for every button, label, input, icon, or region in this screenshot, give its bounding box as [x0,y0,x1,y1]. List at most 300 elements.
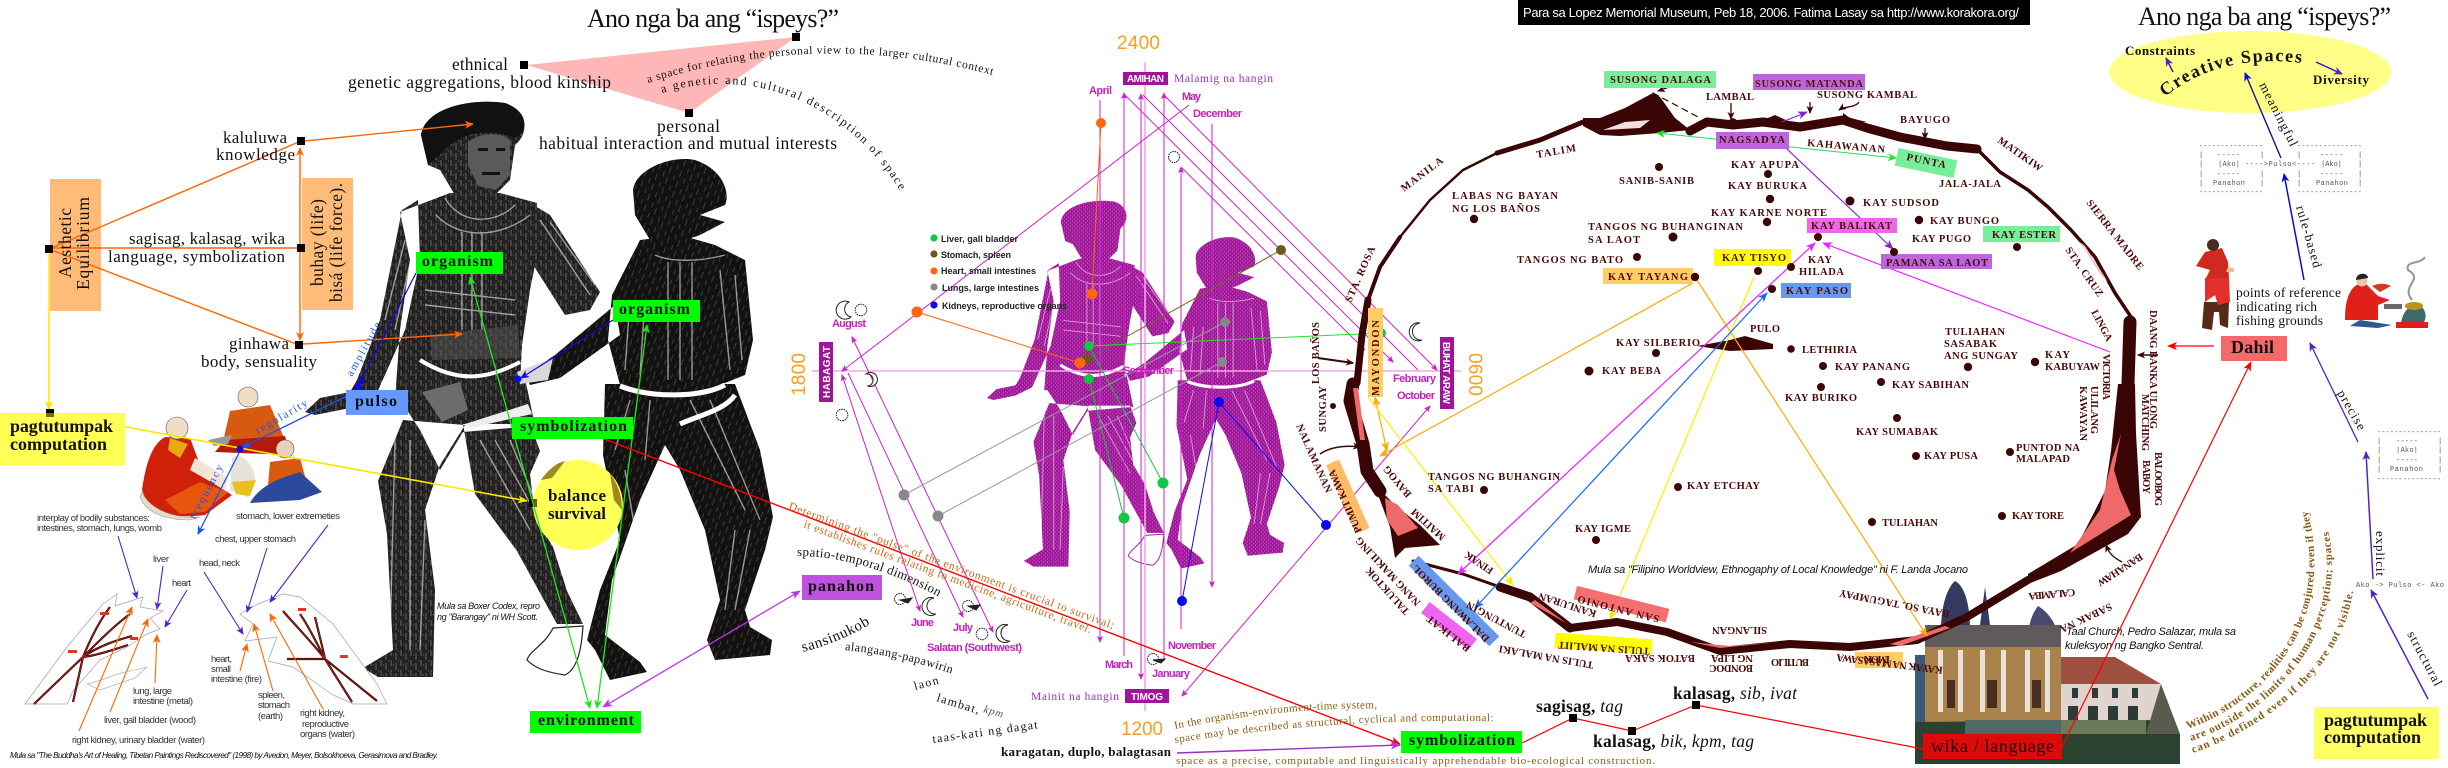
pulse point labels: interplay of bodily substances: [37,513,150,524]
language variants: kalasag, sib, ivat [1673,683,1798,703]
calendar direction labels: TIMOG [1131,692,1163,703]
ascii pulse diagram: top: ----- [2320,152,2343,160]
map small pointers [1318,86,2158,562]
points of reference text: indicating rich [2236,299,2317,314]
ascii pulse diagram: bottom: Panahon [2390,466,2423,474]
brown statement on organism-environment-time system: In the organism-environment-time system, [1174,702,1376,729]
aesthetic equilibrium diagram: bisá (life force). [326,183,346,302]
calendar direction labels: 1200 [1121,719,1163,740]
map place labels: upright: PUNTOD NA [2016,443,2080,454]
curved statement on structure: can be defined even if they are not visible. [2192,592,2354,752]
spatio-temporal word list: lambat, [935,690,981,717]
ascii pulse diagram: top [2199,143,2362,197]
map place labels: rotated around the coast: CALAMBA [2028,586,2076,601]
map place labels: upright: KAY SUDSOD [1863,198,1939,209]
panahon box [802,575,882,600]
map place labels: rotated around the coast: NG LIPA [1711,652,1753,663]
calendar month labels: March [1105,659,1133,671]
spatio-temporal word list: sansinukob [802,618,869,652]
ascii pulse diagram: bottom: ----- [2396,438,2418,446]
aesthetic equilibrium diagram: buhay (life) [307,199,327,286]
calendar direction labels: Malamig na hangin [1174,73,1273,85]
title: left: Ano nga ba ang “ispeys?” [587,4,839,33]
calendar month labels: January [1152,668,1191,680]
calendar organ connectors [904,123,1381,601]
map place labels: upright: BAYUGO [1900,115,1950,126]
map place labels: upright: SUSONG KAMBAL [1817,90,1917,101]
organism box 2 [613,300,700,322]
calendar month labels: July [953,622,974,634]
spatio-temporal word list: taas-kati ng dagat [931,717,1039,746]
calendar direction labels: Mainit na hangin [1031,691,1119,703]
calendar month labels: June [911,617,934,629]
curved statement on structure: are outside the limits of human perception; spaces [2190,532,2334,741]
triangle diagram: ethnical, personal: a space for relating the personal view to the larger cultural context [647,46,994,83]
pulse arrows: amplitude, regularity, frequency: frequency [187,462,226,521]
map place labels: upright: KAY BUNGO [1930,216,1999,227]
map place labels: upright: KAY SILBERIO [1616,338,1700,349]
illustration: man in red [2196,239,2234,330]
map place labels: upright: SUSONG DALAGA [1610,75,1711,86]
balance survival circle: survival [548,504,606,523]
caption: Boxer Codex: Mula sa Boxer Codex, repro [437,601,540,611]
map place labels: upright: TULIAHAN [1945,327,2005,338]
map place labels: rotated around the coast: TALUKTOK [1363,564,1412,616]
organism box 1 [416,252,503,274]
map place labels: upright: JALA-JALA [1939,179,2001,190]
map place labels: rotated around the coast: MANILA [1399,155,1446,194]
illustration: cooking figure and smoke [2345,257,2428,328]
symbolization box 1 [512,417,633,439]
ascii pulse diagram: top: | [2199,152,2203,160]
map place labels: upright: KAY SUMABAK [1856,427,1939,438]
map place labels: rotated around the coast: MATCHING [2139,394,2150,451]
yellow computation arrow and box: computation [10,434,107,454]
aesthetic equilibrium diagram: knowledge [216,145,295,164]
map place labels: rotated around the coast: ULILANG [2088,386,2099,434]
calendar legend [930,234,1067,311]
spatio-temporal word list: karagatan, duplo, balagtasan [1001,744,1172,759]
aesthetic equilibrium diagram: Equilibrium [73,197,93,290]
caption: Taal Church: kuleksyon ng Bangko Sentral. [2065,640,2204,652]
language variants [1536,683,1798,751]
ascii pulse diagram: top: |Ako| [2218,161,2240,169]
yellow computation arrow and box: pagtutumpak [10,416,113,436]
environment pulse statement: it establishes rules relating to medicine, agriculture, travel. [802,519,1093,636]
map place labels: rotated around the coast: BALIKAT [1425,613,1473,653]
Dahil box [2221,336,2287,361]
environment box: environment [538,712,635,729]
symbolization box 2: symbolization [1409,732,1515,749]
ascii pulse diagram: top: Panahon [2213,180,2245,188]
top banner: Para sa Lopez Memorial Museum, Peb 18, 2006. Fatima Lasay sa http://www.korakora.org/ [1523,5,2019,20]
map place labels: upright: KAY [1808,255,1832,266]
ascii pulse diagram: top: | [2260,171,2264,179]
flow: meaningful arrow: meaningful [2256,80,2302,149]
map place labels: rotated around the coast: LINGA [2088,308,2114,344]
caption: Buddha's art of healing: Mula sa "The Buddha's Art of Healing, Tibetan Paintings Rediscovered" (1998) by Avedon, Meyer, Bolsokhoeva, Gerasimova and Bradley. [10,751,438,760]
pulse point arrows [79,525,328,731]
map place labels: upright: LAMBAL [1706,92,1754,103]
map place labels: upright: LETHIRIA [1802,345,1857,356]
spatio-temporal word list: laon [912,673,940,693]
calendar month labels: November [1168,640,1217,652]
map place labels: upright: KAY PUGO [1912,234,1971,245]
pulse arrows: amplitude, regularity, frequency: regularity [254,397,310,437]
aesthetic equilibrium diagram: kaluluwa [223,128,287,147]
triangle diagram: ethnical, personal: a genetic and cultural description of space [662,76,904,190]
ascii pulse diagram: top: ---->Pulso<---- [2245,161,2315,169]
pink bays on the coast [1353,120,2131,648]
map place labels: rotated around the coast: SUNGAY [1318,386,1329,432]
calendar month labels: August [832,318,866,330]
map place labels: upright: PUNTA [1905,152,1947,171]
map place labels: rotated around the coast: BAYOG [1381,463,1414,499]
ascii pulse diagram: bottom: | [2377,457,2381,465]
map place labels: rotated around the coast: SIERRA MADRE [2084,198,2145,273]
map place labels: upright: TULIAHAN [1882,518,1938,529]
calendar legend: Heart, small intestines [941,266,1036,276]
triangle diagram: ethnical, personal: ethnical [452,54,508,74]
points of reference text [2236,285,2341,328]
map place labels: upright: LABAS NG BAYAN [1452,191,1558,202]
ascii pulse diagram: bottom: | [2438,438,2442,446]
calendar month lines [842,93,1437,696]
flow: explicit arrow [2366,452,2388,579]
map place labels: rotated around the coast: FINAK [1462,548,1496,576]
pulso box [346,390,408,415]
map place labels: upright: NAGSADYA [1719,135,1785,146]
tattooed figures illustration [305,102,773,680]
map place labels: upright: KAY BALIKAT [1811,221,1892,232]
flow: rule-based arrow [2284,174,2325,280]
creative spaces ellipse: Constraints [2125,43,2195,58]
pagtutumpak computation box: right [2314,707,2439,759]
caption: Taal Church [2065,626,2236,652]
pulse point labels: (earth) [258,711,283,722]
top banner [1518,0,2030,25]
map place labels: upright: SANIB-SANIB [1619,176,1694,187]
map place labels: rotated around the coast: PUMIT KAWA [1327,467,1365,534]
ascii pulse diagram: top: --------------- [2199,143,2263,151]
illustration: monks reading the pulse [140,387,322,520]
calendar direction labels: HABAGAT [822,346,833,398]
ascii pulse diagram: top: --------------- [2297,143,2362,151]
calendar direction labels: 1800 [789,353,810,396]
map place labels: upright: KAY ETCHAY [1687,481,1760,492]
pulse point labels: intestine (metal) [133,696,193,707]
aesthetic equilibrium diagram [45,124,473,371]
Taal Church painting [1915,581,2180,764]
map place labels: upright: KAY BURUKA [1728,181,1807,192]
ascii pulse diagram: bottom: | [2438,457,2442,465]
calendar axes [812,62,1461,711]
ascii pulse diagram: top: --------------- [2297,189,2362,197]
brown statement on organism-environment-time system: space as a precise, computable and linguistically apprehendable bio-ecological construction. [1176,755,1655,767]
map place labels: rotated around the coast: MATIKIW [1995,135,2045,175]
environment box [530,711,641,733]
flow: precise arrow: precise [2334,387,2370,433]
calendar direction labels [789,33,1485,740]
map place labels: upright: KAY TORE [2012,511,2064,522]
triangle diagram: ethnical, personal [348,33,994,190]
map place labels: upright: MALAPAD [2016,454,2070,465]
map place labels: upright: KAY IGME [1575,524,1631,535]
map place labels: upright: SA LAOT [1588,235,1640,246]
purple tattooed figures on calendar [987,201,1285,568]
calendar legend: Kidneys, reproductive organs [942,301,1067,311]
map place labels: rotated around the coast: SAN ANTONIO [1577,593,1661,624]
map place labels: upright: SA TABI [1428,484,1474,495]
pulse point labels: heart [172,578,191,589]
ascii pulse diagram: top: | [2297,180,2301,188]
map place labels: rotated around the coast: NANG MAKILING [1354,534,1423,607]
pulse point labels: stomach, lower extremeties [236,511,340,522]
map place dots [1330,163,2039,544]
calendar direction labels: BUHAT ARAW [1440,342,1451,405]
moon phase symbols [836,152,1422,664]
ascii pulse diagram: top: ----- [2320,171,2343,179]
ascii pulse diagram: top: ----- [2217,171,2240,179]
map place labels: rotated around the coast: IMOK [1863,653,1890,664]
ascii pulse diagram: bottom: --------------- [2377,476,2441,484]
calendar legend: Stomach, spleen [941,250,1011,260]
wika language box: wika / language [1931,736,2054,756]
ascii pulse diagram: bottom: | [2438,466,2442,474]
ascii pulse diagram: bottom: | [2377,447,2381,455]
map place labels: rotated around the coast: BATOK SAKA [1625,652,1695,663]
aesthetic equilibrium diagram: body, sensuality [201,352,318,371]
ascii pulse diagram: bottom: --------------- [2377,429,2441,437]
balance survival circle [529,460,623,550]
ascii pulse diagram: top: | [2358,152,2362,160]
pulse point labels: intestines, stomach, lungs, womb [37,523,162,534]
balance survival circle: balance [548,486,606,505]
pagtutumpak computation box: right: computation [2324,727,2421,747]
ascii pulse diagram: top: | [2260,152,2264,160]
caption: Taal Church: Taal Church, Pedro Salazar, mula sa [2066,626,2236,638]
brown statement on organism-environment-time system: space may be described as structural, cyclical and computational: [1174,714,1493,744]
map place labels: rotated around the coast: SILANGAN [1712,624,1767,635]
ascii pulse diagram: top: | [2199,180,2203,188]
map place labels: upright: NG LOS BAÑOS [1452,203,1540,215]
calendar month labels: September [1123,365,1175,377]
calendar legend: Liver, gall bladder [941,234,1018,244]
map place labels: rotated around the coast: TULIS NA MALAKI [1498,642,1595,670]
calendar month labels: May [1182,91,1202,103]
ascii pulse diagram: top: | [2297,171,2301,179]
map place labels: upright: KAY TISYO [1722,253,1786,264]
aesthetic equilibrium diagram: language, symbolization [108,247,286,266]
flow: structural arrow [2371,590,2446,699]
environment pulse statement: Determining the "pulse" of the environment is crucial to survival; [787,501,1116,632]
hand drawings [25,594,387,704]
map place labels: rotated around the coast: DAANG BANKA ULONG [2147,310,2158,429]
points of reference text: points of reference [2236,285,2341,300]
map place labels: upright: KAY PANANG [1835,362,1910,373]
triangle diagram: ethnical, personal: habitual interaction and mutual interests [539,133,837,153]
map colored place boxes [1326,71,2060,668]
white foot of the front figure [527,626,583,675]
panahon box: panahon [808,578,874,595]
pulse point labels: heart, [211,654,232,665]
pulse arrows: amplitude, regularity, frequency [187,273,613,534]
creative spaces ellipse: Diversity [2313,72,2370,87]
calendar direction labels: AMIHAN [1127,74,1164,85]
ascii pulse diagram: top: Panahon [2316,180,2348,188]
map place labels: upright: KAHAWANAN [1807,138,1886,156]
calendar month labels: October [1397,390,1436,402]
aesthetic equilibrium diagram: sagisag, kalasag, wika [129,229,285,248]
organism box 1: organism [422,253,494,270]
flow: explicit arrow: explicit [2373,531,2388,576]
map place labels: rotated around the coast: BONDOC [1709,662,1753,673]
map place labels: upright [1428,75,2100,535]
symbolization box 1: symbolization [520,418,627,435]
ascii pulse diagram: top: ----- [2217,152,2240,160]
map place labels: upright: SASABAK [1944,339,1998,350]
map place labels: upright: PAMANA SA LAOT [1886,258,1988,269]
ascii pulse diagram: top: | [2260,180,2264,188]
ascii pulse diagram: bottom: ----- [2396,457,2418,465]
map place labels: upright: KABUYAW [2045,362,2100,373]
map place labels: rotated around the coast: BANAHAW [2094,550,2144,588]
calendar legend: Lungs, large intestines [942,283,1039,293]
calendar month labels: April [1089,85,1112,97]
map place labels: rotated around the coast: DALAWANG BUROL [1411,562,1492,644]
map place labels: rotated around the coast: KANLURAN [1537,589,1598,619]
spatio-temporal word list: alangaang-papawirin [845,642,952,674]
map place labels: rotated around the coast: MAYONDON [1371,320,1382,396]
title: right: Ano nga ba ang “ispeys?” [2138,2,2391,31]
ascii pulse diagram: top: | [2358,180,2362,188]
face shading of front figure [468,134,510,190]
calendar month labels: December [1193,108,1243,120]
aesthetic equilibrium diagram: ginhawa [229,334,289,353]
calendar direction labels: 0600 [1464,353,1485,396]
map place labels: upright: HILADA [1799,267,1844,278]
map place labels: rotated around the coast: LOS BAÑOS [1310,322,1322,384]
flow: rule-based arrow: rule-based [2293,204,2325,270]
map place labels: rotated around the coast: STA. CRUZ [2063,245,2105,299]
creative spaces ellipse: Creative Spaces [2160,50,2302,94]
spatio-temporal word list [798,548,1172,759]
map place labels: rotated around the coast: MAITIM [1409,506,1448,542]
map place labels: upright: KAY APUPA [1731,160,1799,171]
calendar month labels: February [1393,373,1437,385]
map place labels: upright: TANGOS NG BUHANGIN [1428,472,1560,483]
pulse point labels: right kidney, urinary bladder (water) [72,735,205,746]
Dahil box: Dahil [2231,337,2274,357]
map place labels: upright: KAY KARNE NORTE [1711,208,1827,219]
map place labels: rotated around the coast: TULIS NA MALIIT [1558,639,1650,656]
map place labels: rotated around the coast: STA. ROSA [1344,245,1378,304]
ascii pulse diagram: bottom [2356,429,2444,590]
map place labels: rotated around the coast: BUTILIO [1771,656,1809,667]
map place labels: upright: TANGOS NG BATO [1517,255,1623,266]
language variants: kalasag, bik, kpm, tag [1593,731,1754,751]
caption: Jocano: Mula sa "Filipino Worldview, Ethnogaphy of Local Knowledge" ni F. Landa Jocano [1588,564,1968,576]
map place labels: rotated around the coast: TALIM [1536,143,1577,161]
language variants: sagisag, tag [1536,696,1623,716]
points of reference text: fishing grounds [2236,313,2323,328]
pulse point labels: stomach [258,700,290,711]
map place labels: upright: KAY ESTER [1992,230,2056,241]
calendar month labels [832,85,1437,680]
ascii pulse diagram: bottom: | [2377,466,2381,474]
map place labels: rotated around the coast: SABAK NA [2058,600,2113,634]
pulse arrows: amplitude, regularity, frequency: amplitude [344,320,384,378]
map place labels: upright: KAY SABIHAN [1892,380,1969,391]
organism, symbolization and environment flows [470,277,2251,753]
calendar direction labels: 2400 [1117,33,1160,54]
map place labels: rotated around the coast: VICTORIA [2100,354,2111,400]
pulse point labels [37,511,355,746]
pulse point labels: spleen, [258,690,285,701]
map place labels: upright: KAY PASO [1786,286,1848,297]
pulse point labels: small [211,664,231,675]
caption: Boxer Codex [437,601,540,622]
map place labels: rotated around the coast: KAWAYAN [2077,386,2088,441]
pulse point labels: chest, upper stomach [215,534,296,545]
curved statement on structure: Within structure, realities can be conjured even if they [2186,512,2315,728]
map place labels: upright: KAY BEBA [1602,366,1661,377]
triangle diagram: ethnical, personal: personal [657,116,720,136]
calendar organ nodes [898,118,1386,606]
caption: Boxer Codex: ng "Barangay" ni WH Scott. [437,612,538,622]
pulse point labels: liver, gall bladder (wood) [104,715,196,726]
flow: meaningful arrow [2245,73,2302,158]
brown statement on organism-environment-time system [1174,702,1655,767]
flow: precise arrow [2310,343,2370,442]
pulse point labels: lung, large [133,686,172,697]
map coastline [1350,93,2141,651]
ascii pulse diagram: top: | [2358,161,2362,169]
spatio-temporal word list: spatio-temporal dimension [798,548,940,596]
map place labels: upright: KAY BURIKO [1785,393,1857,404]
calendar month labels: Salatan (Southwest) [927,642,1022,654]
map place labels: rotated around the coast: KAYAK NA MASASAWA [1835,651,1943,675]
ascii pulse diagram: bottom: Ako -> Pulso <- Ako [2356,582,2444,590]
map place labels: upright: ANG SUNGAY [1944,351,2018,362]
map place labels: upright: PULO [1750,324,1780,335]
ascii pulse diagram: top: --------------- [2199,189,2263,197]
pulse point labels: reproductive [302,719,349,730]
pulse point labels: right kidney, [300,708,345,719]
map place labels: rotated around the coast: BABOY [2140,460,2151,494]
organism box 2: organism [619,301,691,318]
ascii pulse diagram: bottom: | [2377,438,2381,446]
aesthetic equilibrium diagram: Aesthetic [55,208,75,278]
pulse point labels: head, neck [199,558,240,569]
ascii pulse diagram: bottom: | [2438,447,2442,455]
ascii pulse diagram: top: | [2199,161,2203,169]
ascii pulse diagram: bottom: |Ako| [2396,447,2418,455]
pulse point labels: intestine (fire) [211,674,262,685]
pulse point labels: organs (water) [300,729,355,740]
map place labels: rotated around the coast [1293,135,2163,675]
symbolization box 2 [1401,731,1522,753]
map connection arrows [1368,112,2110,636]
map place labels: rotated around the coast: BAYA SO. TAGUMPAY [1838,587,1951,619]
triangle diagram: ethnical, personal: genetic aggregations, blood kinship [348,72,611,92]
ascii pulse diagram: top: | [2297,152,2301,160]
map place labels: upright: KAY PUSA [1924,451,1978,462]
flow: structural arrow: structural [2404,628,2446,689]
map place labels: rotated around the coast: TUNTUNGIN [1465,598,1528,639]
spatio-temporal word list: kpm [982,703,1005,721]
pulse point labels: liver [153,554,169,565]
